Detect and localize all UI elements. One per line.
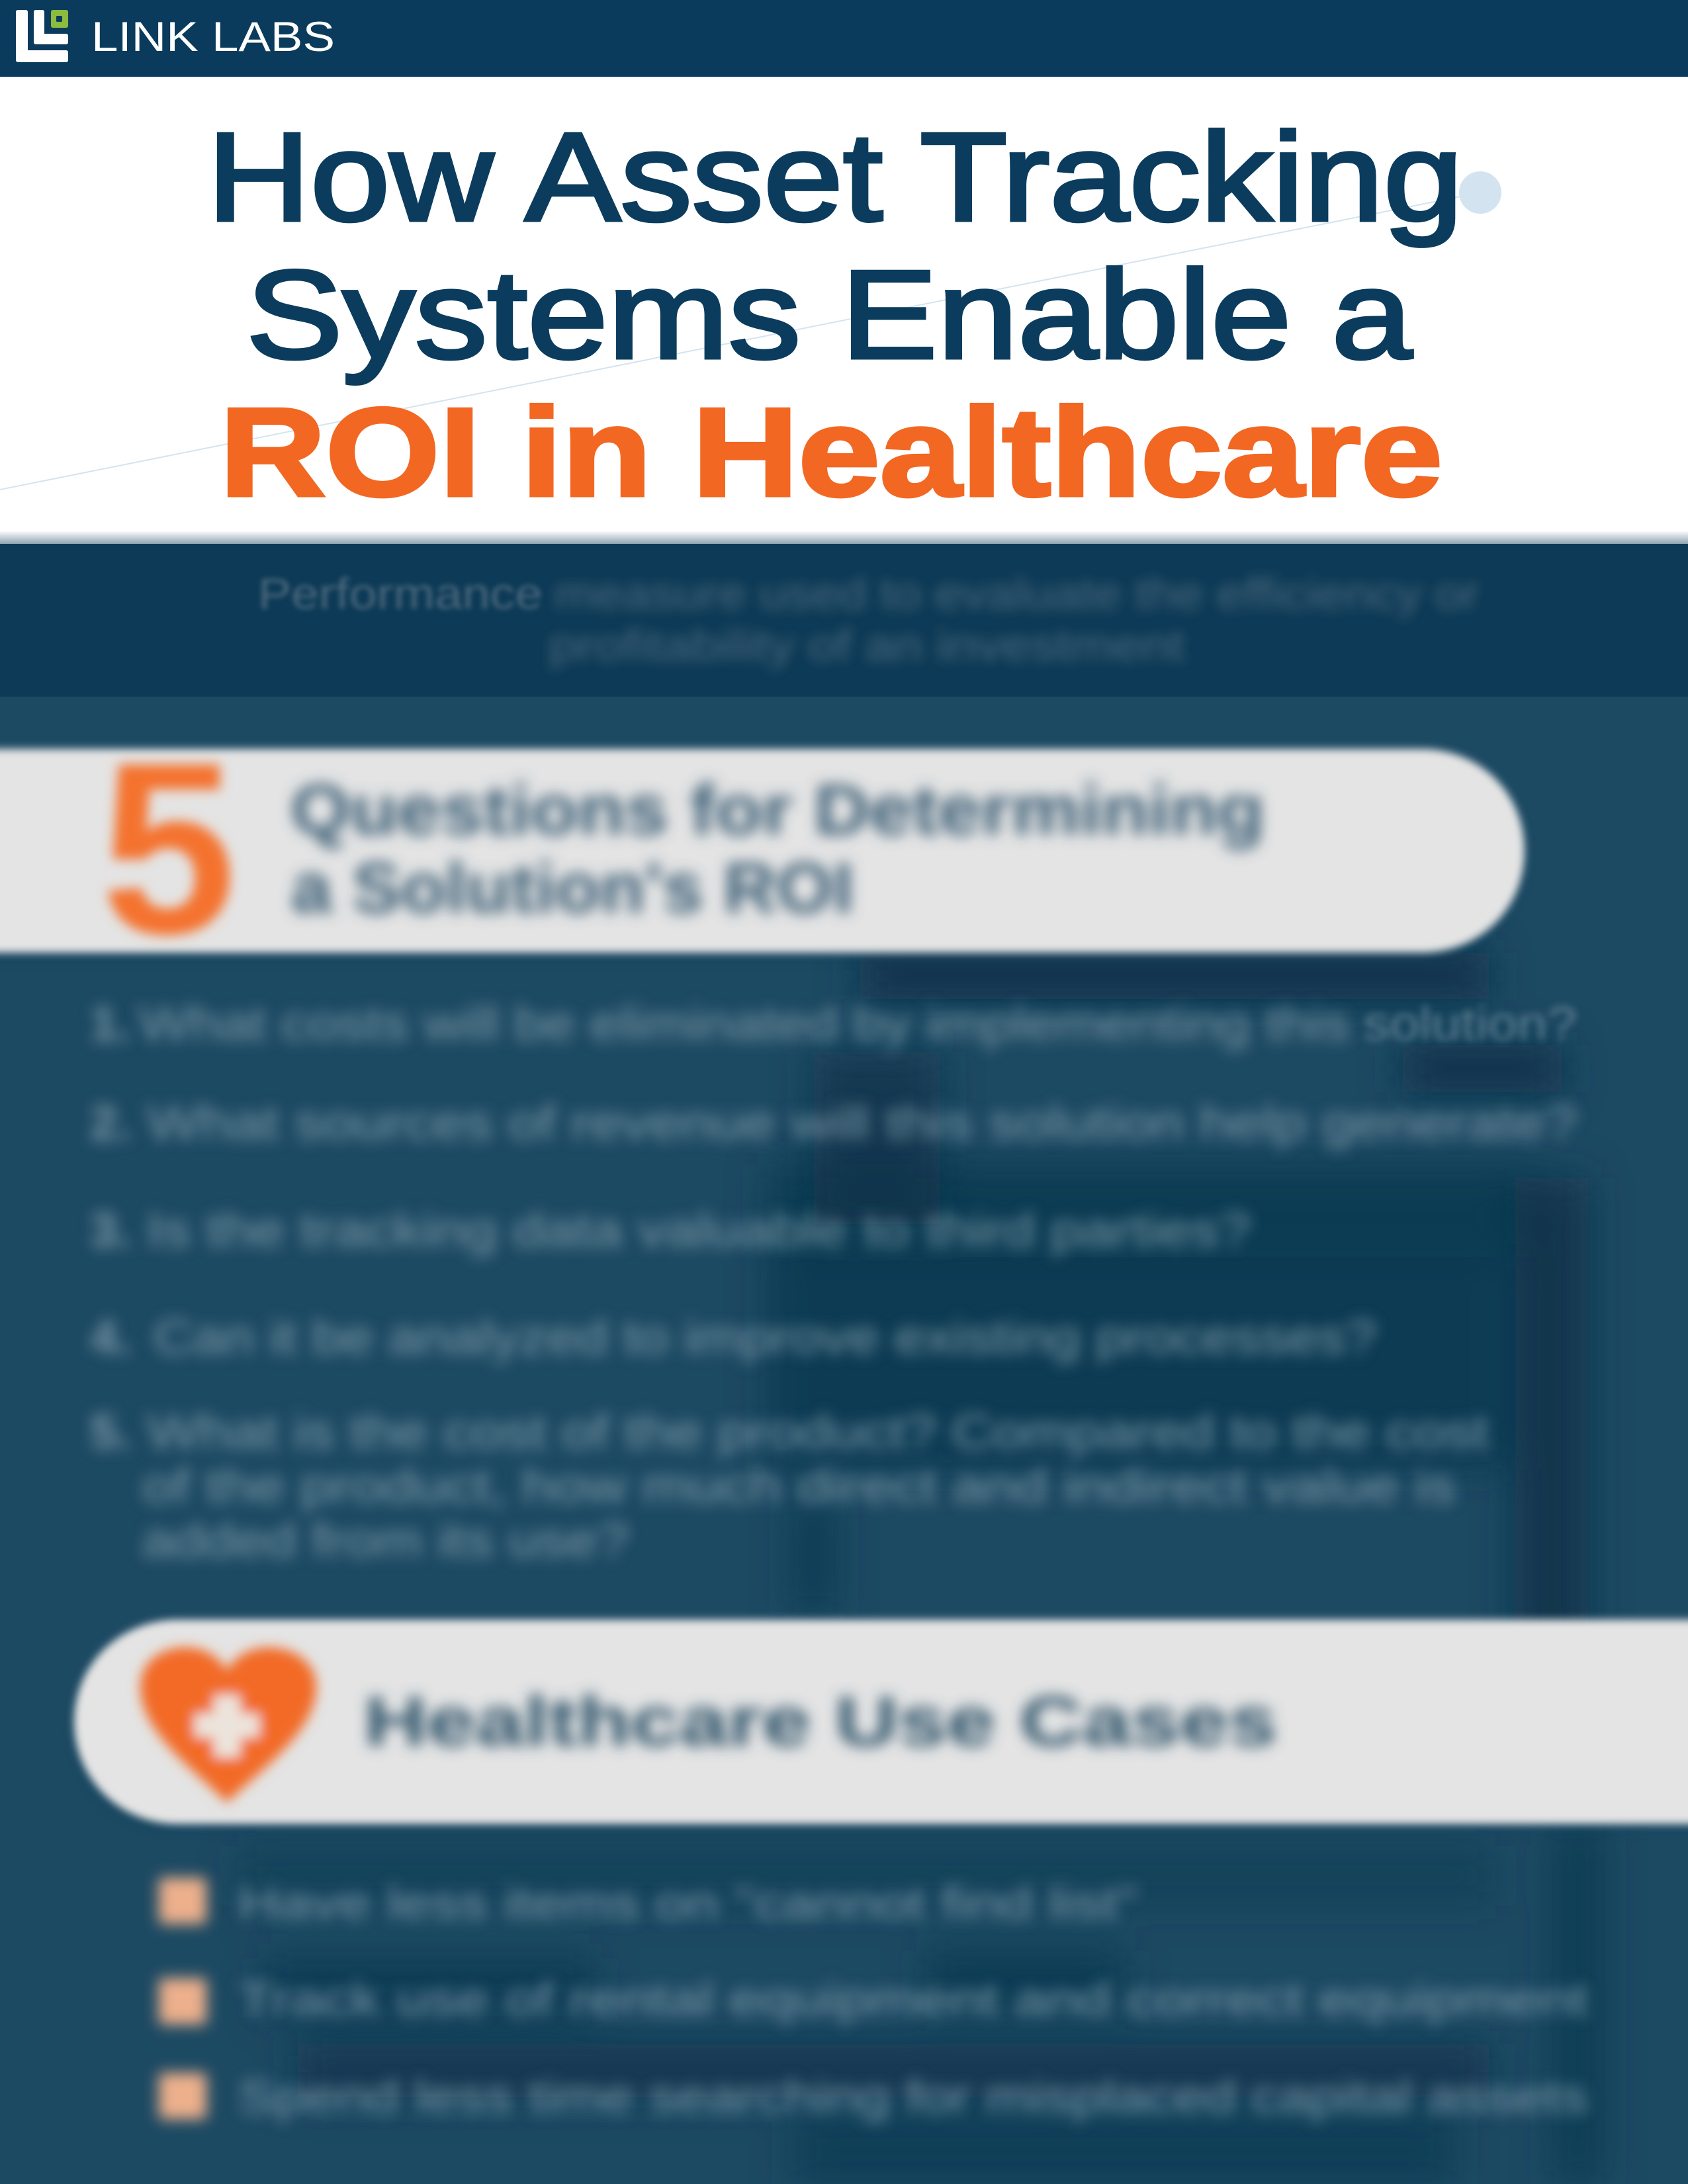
banner: 5 questions xyxy=(0,712,1525,985)
banner heading: Questions for Determining xyxy=(290,769,1265,850)
question 1: What costs will be eliminated by implementing this xyxy=(139,998,1350,1051)
title: Systems Enable a xyxy=(246,245,1412,385)
logo wordmark: LINK LABS xyxy=(91,14,335,60)
title: How Asset Tracking xyxy=(207,107,1463,247)
question 2: What sources of revenue will this solution help generate? xyxy=(147,1097,1577,1150)
question 5 xyxy=(91,1406,1489,1567)
big number 5: 5 xyxy=(101,712,236,985)
question 3: Is the tracking data valuable to third parties? xyxy=(147,1204,1251,1257)
question 1: 1. xyxy=(91,998,130,1051)
definition text: measure used to evaluate the efficiency or xyxy=(555,569,1479,618)
question 4: Can it be analyzed to improve existing processes? xyxy=(154,1311,1376,1364)
question list xyxy=(91,998,1577,1567)
page background xyxy=(0,697,1688,2184)
question 5: added from its use? xyxy=(142,1514,629,1567)
use case list xyxy=(159,1877,1588,2122)
question 2: 2. xyxy=(91,1097,130,1150)
question 5: What is the cost of the product? Compared to the cost xyxy=(147,1406,1489,1459)
question 4: 4. xyxy=(91,1311,130,1364)
header bar xyxy=(0,0,1688,77)
title xyxy=(207,107,1463,523)
banner: healthcare use cases xyxy=(74,1620,1688,1829)
use case 1: Have less items on "cannot find list" xyxy=(238,1877,1138,1929)
title panel bottom shadow xyxy=(0,531,1688,545)
definition text: Performance xyxy=(258,569,543,618)
use case 2: Track use of rental equipment and correct equipment xyxy=(238,1974,1588,2025)
question 5: of the product, how much direct and indirect value is xyxy=(142,1460,1456,1513)
question 5: 5. xyxy=(91,1406,130,1459)
background photo silhouette xyxy=(238,953,1601,2184)
icon: heart with medical cross xyxy=(140,1647,316,1803)
definition text: profitability of an investment xyxy=(549,621,1184,670)
decorative connector line and dot xyxy=(0,171,1501,490)
definition text xyxy=(258,569,1479,670)
banner heading: a Solution's ROI xyxy=(291,848,854,928)
banner heading xyxy=(290,769,1265,928)
definition band xyxy=(0,544,1688,697)
white title panel xyxy=(0,77,1688,544)
question 1: solution? xyxy=(1363,998,1577,1051)
logo mark xyxy=(16,10,68,62)
title: ROI in Healthcare xyxy=(220,382,1443,523)
banner heading: Healthcare Use Cases xyxy=(364,1682,1277,1761)
question 3: 3. xyxy=(91,1204,130,1257)
use case 3: Spend less time searching for misplaced capital assets xyxy=(238,2071,1588,2122)
